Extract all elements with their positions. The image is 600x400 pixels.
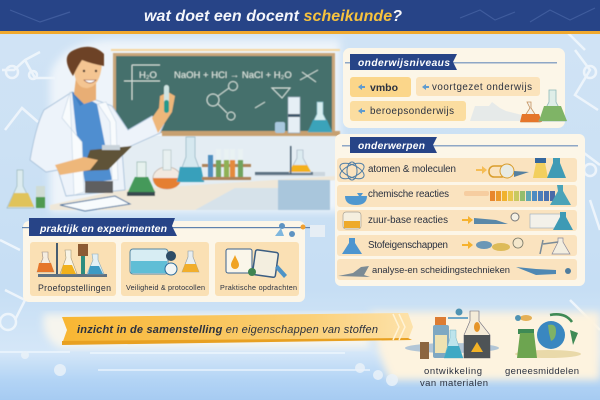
chalkboard (111, 49, 340, 136)
card: Praktische opdrachten: Praktische opdrachten (220, 283, 297, 292)
ph scale (490, 191, 555, 201)
row: analyse- en scheidingstechnieken: analyse-en scheidingstechnieken (372, 264, 510, 275)
icon: atom (338, 160, 366, 182)
icon: materialen (405, 308, 499, 359)
neck and head (74, 78, 96, 104)
heading: praktijk en experimenten (29, 218, 177, 236)
panel: onderwijsniveaus (343, 48, 567, 128)
row: zuur-base reacties: zuur-base reacties (368, 215, 448, 226)
bottom strip (0, 308, 600, 389)
shirt (72, 92, 112, 183)
heading: onderwijsniveaus (350, 54, 457, 70)
icon: flasks (470, 90, 567, 122)
card: Praktische opdrachten (215, 242, 299, 296)
heading: onderwijsniveaus: onderwijsniveaus (358, 58, 450, 69)
row: atomen & moleculen (337, 158, 577, 182)
title: wat doet een docent scheikunde? (144, 8, 402, 25)
chip: voortgezet onderwijs (416, 77, 540, 96)
coat (30, 92, 164, 196)
heading: onderwerpen: onderwerpen (358, 141, 425, 152)
icon: molecule (275, 223, 325, 237)
caption: van materialen: van materialen (420, 378, 488, 389)
icon: geneesmiddelen (515, 314, 581, 358)
heading: praktijk en experimenten: praktijk en experimenten (39, 223, 167, 235)
panel: onderwerpen (335, 134, 585, 286)
caption: ontwikkeling: ontwikkeling (424, 366, 482, 377)
callout banner: inzicht in de samenstelling en eigenschappen van stoffen (77, 324, 378, 336)
heading: onderwerpen (350, 137, 437, 153)
counter (50, 172, 335, 211)
chalkboard: H₂O (139, 70, 157, 81)
header bar (0, 0, 600, 34)
chip: beroepsonderwijs: beroepsonderwijs (370, 106, 454, 117)
chip: vmbo (350, 77, 411, 97)
row: Stofeigenschappen: Stofeigenschappen (368, 240, 448, 251)
row: zuur-base reacties (337, 210, 577, 231)
bench flasks (7, 137, 313, 208)
row: atomen & moleculen: atomen & moleculen (368, 164, 456, 175)
card: Proefopstellingen (30, 242, 116, 296)
panel: praktijk en experimenten (22, 218, 325, 302)
card: Veiligheid & protocollen: Veiligheid & protocollen (126, 283, 205, 292)
teacher (30, 47, 175, 196)
row: Stofeigenschappen (337, 235, 577, 256)
chip: vmbo: vmbo (370, 82, 398, 94)
card: Veiligheid & protocollen (121, 242, 209, 296)
caption: geneesmiddelen: geneesmiddelen (505, 366, 579, 377)
row: analyse- en scheidingstechnieken (337, 259, 577, 280)
chip: voortgezet onderwijs: voortgezet onderwijs (432, 82, 532, 93)
callout banner (62, 313, 413, 345)
clipboard (82, 146, 132, 171)
card: Proefopstellingen: Proefopstellingen (38, 283, 111, 293)
row: chemische reacties (337, 185, 577, 207)
lapels (62, 92, 118, 195)
classroom scene (7, 47, 340, 211)
chip: beroepsonderwijs (350, 101, 466, 121)
row: chemische reacties: chemische reacties (368, 189, 449, 200)
board flasks (275, 97, 332, 133)
chalkboard: NaOH + HCl → NaCl + H₂O (174, 70, 292, 81)
raised hand (152, 92, 175, 133)
